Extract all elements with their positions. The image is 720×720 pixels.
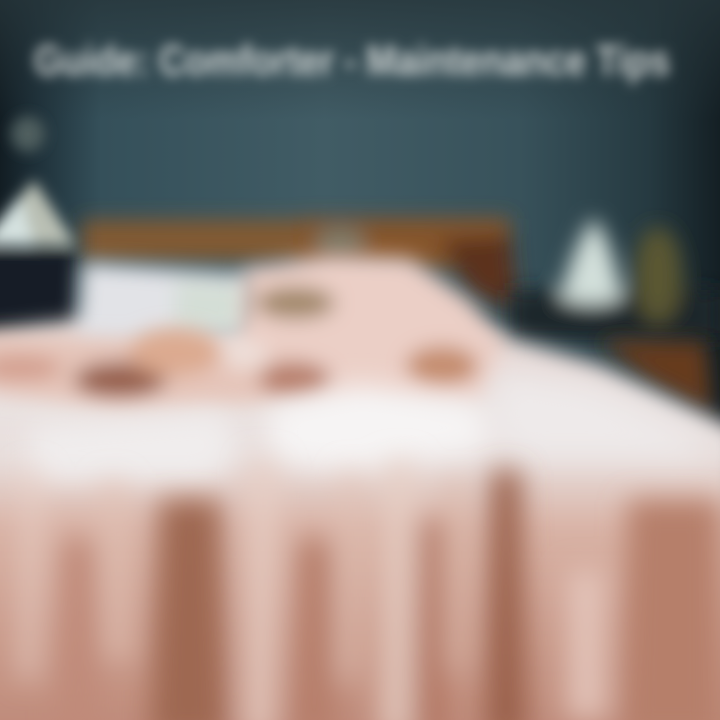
right lamp and plant <box>510 218 720 340</box>
pink pillow mounds <box>0 255 505 410</box>
left nightstand and lamp <box>0 116 76 322</box>
comforter lower body <box>0 320 720 720</box>
comforter hanging folds <box>20 460 720 720</box>
right side wood bench <box>600 340 712 412</box>
white pillows <box>75 262 255 350</box>
white comforter highlights <box>30 375 700 480</box>
headboard <box>82 218 518 312</box>
